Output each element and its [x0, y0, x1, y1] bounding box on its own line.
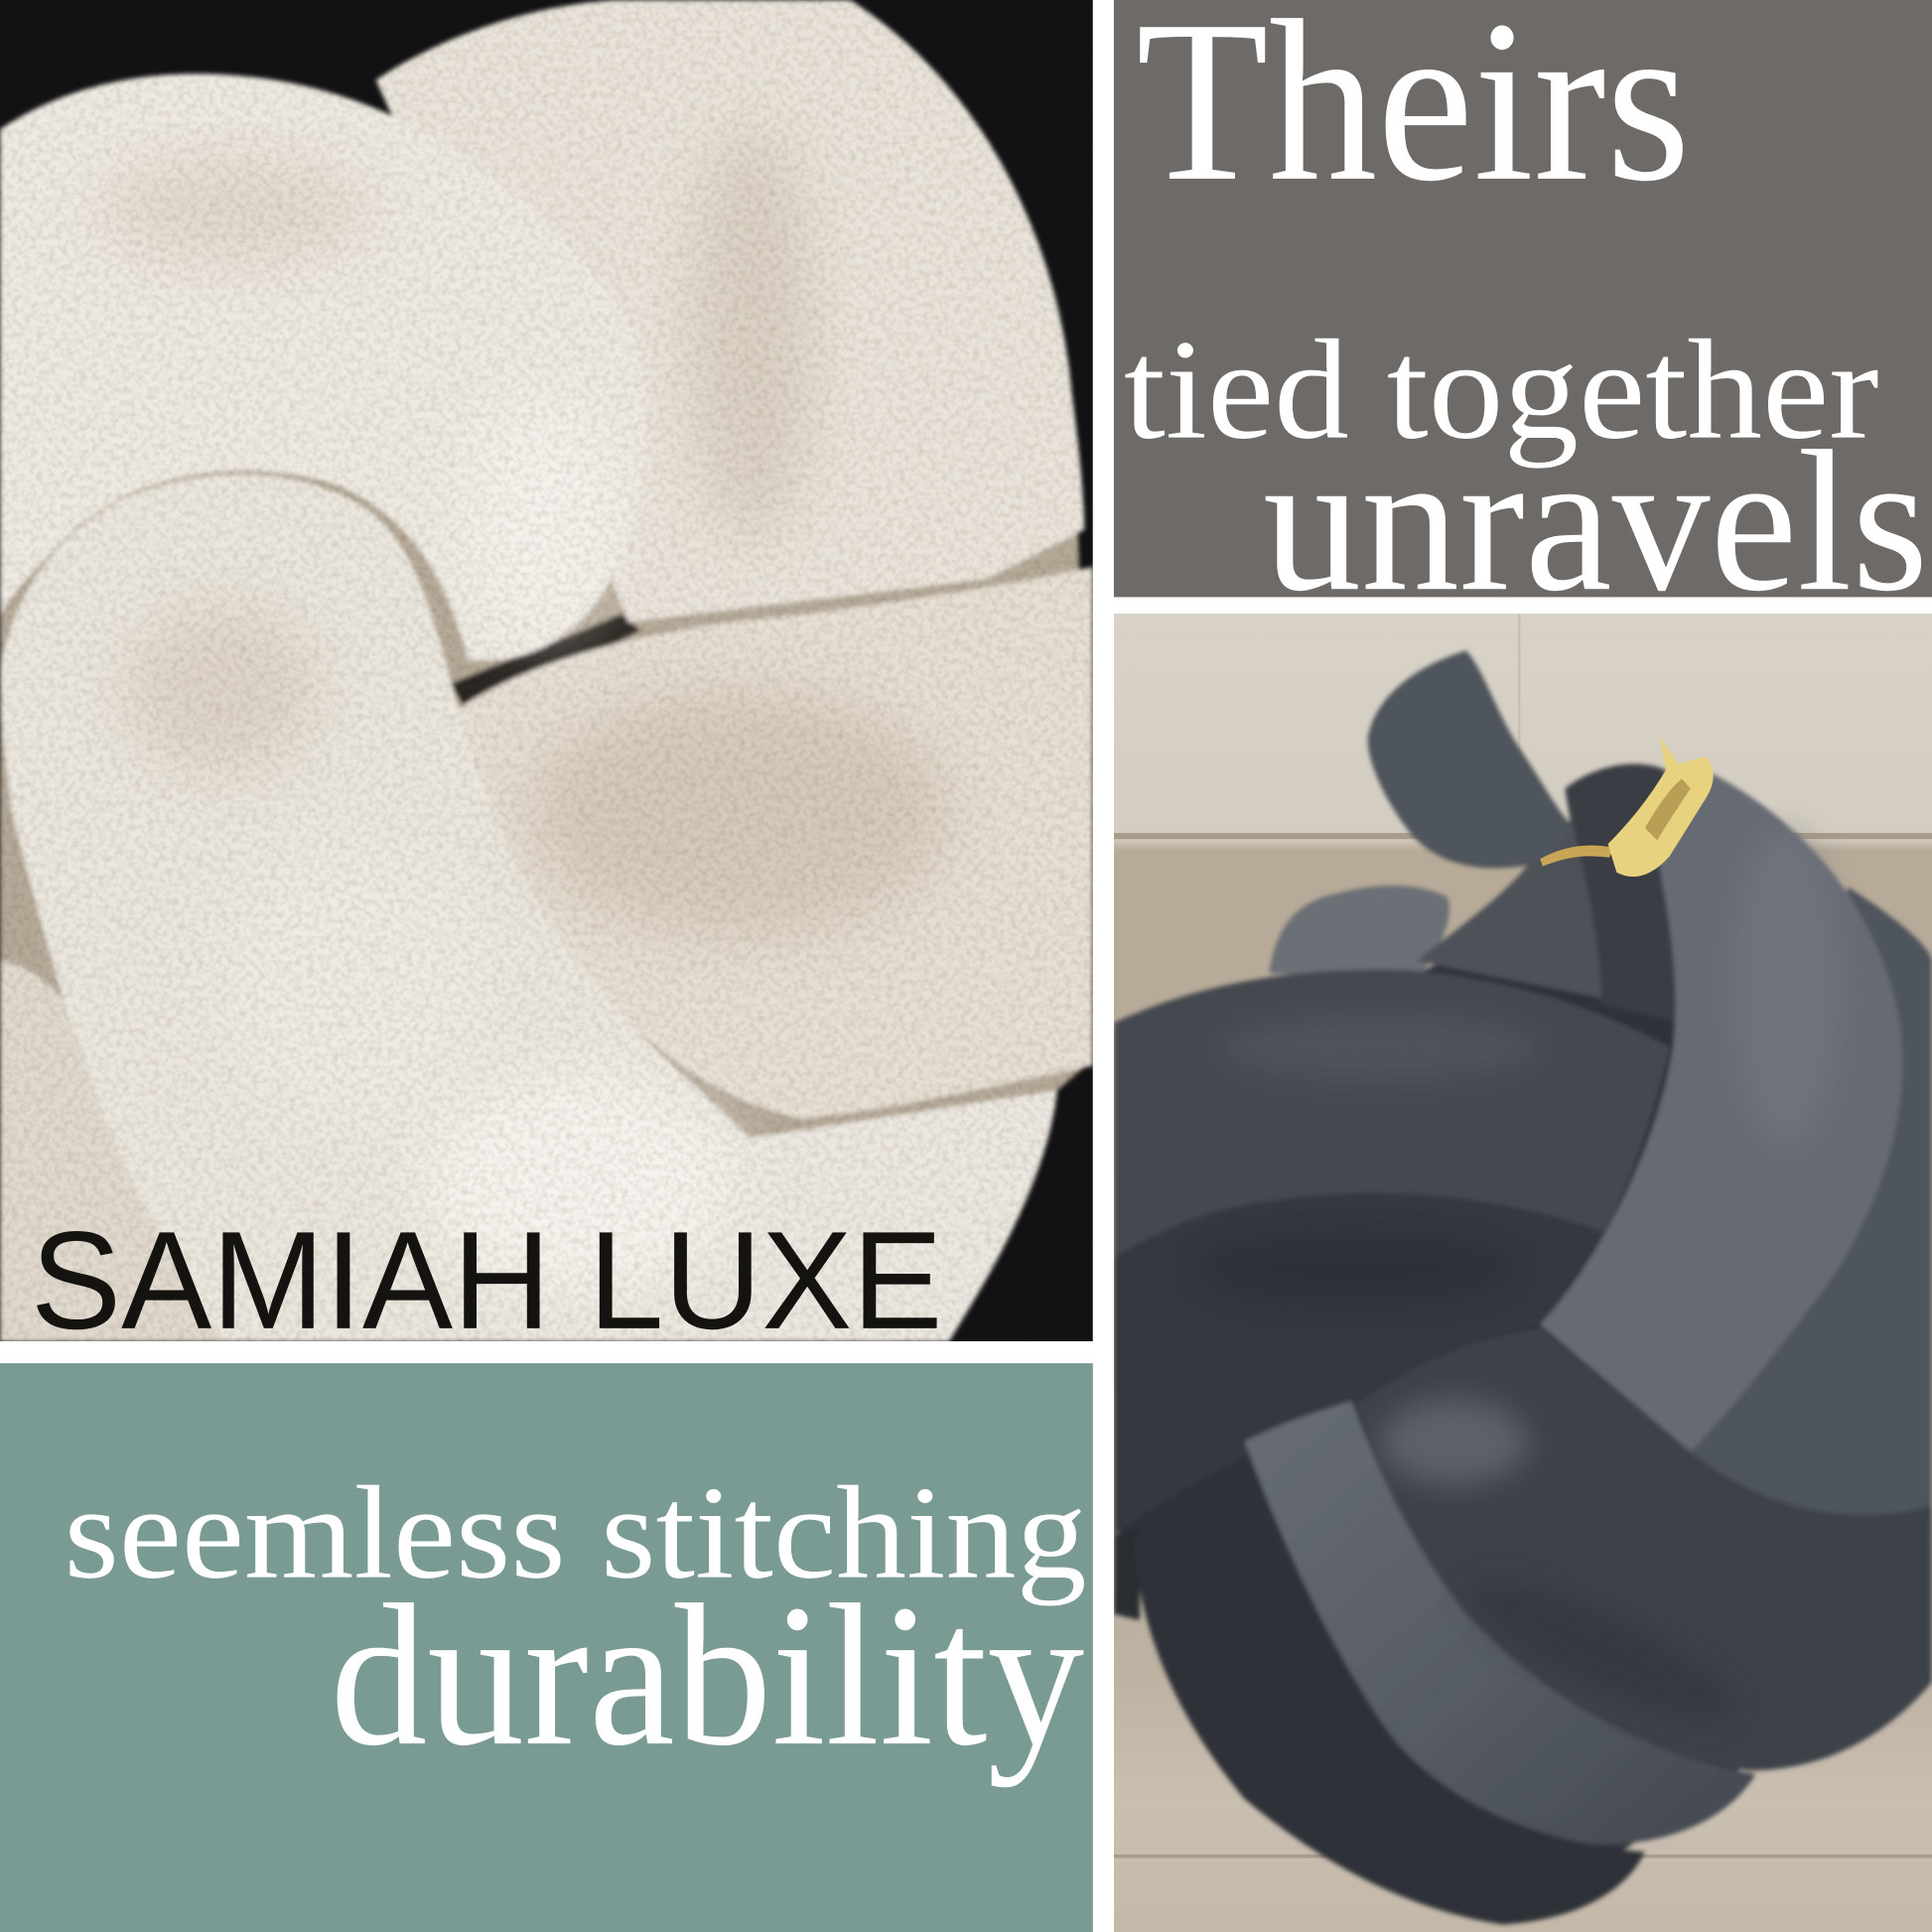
- text: tied together: tied together: [1124, 312, 1879, 470]
- panel: teal durability: [0, 1363, 1093, 1932]
- text: seemless stitching: seemless stitching: [65, 1459, 1087, 1606]
- knot tubes: [1114, 650, 1932, 1925]
- panel: grey theirs: [1114, 0, 1932, 633]
- panel: cream boucle knot photo: [0, 0, 1093, 1342]
- velvet highlights: [1195, 826, 1842, 1747]
- text: durability: durability: [331, 1564, 1084, 1788]
- floor planks: [1114, 614, 1932, 1859]
- shading and highlights on the knot: [98, 123, 949, 1294]
- panel: grey velvet knot photo: [1114, 614, 1932, 1932]
- brand name: SAMIAH LUXE: [31, 1202, 942, 1358]
- icon: gold ribbon: [1540, 737, 1714, 877]
- text: unravels: unravels: [1263, 410, 1928, 633]
